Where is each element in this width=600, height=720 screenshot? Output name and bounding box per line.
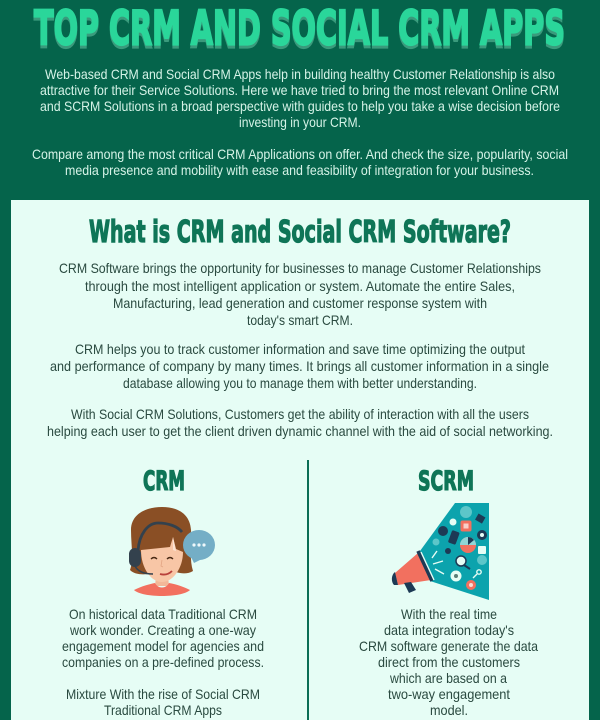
CRM column text: Traditional CRM Apps (104, 702, 222, 718)
SCRM column text: model. (430, 702, 468, 718)
SCRM column text: two-way engagement (388, 686, 510, 702)
icon: megaphone with social icons (392, 503, 489, 600)
SCRM heading: SCRM (418, 466, 474, 497)
CRM column text: companies on a pre-defined process. (62, 654, 264, 670)
intro text: investing in your CRM. (239, 114, 361, 130)
main panel (11, 200, 589, 720)
header background (0, 0, 600, 200)
SCRM column text: CRM software generate the data (359, 638, 538, 654)
panel description text: CRM Software brings the opportunity for businesses to manage Customer Relationships (59, 260, 541, 276)
panel description text: through the most intelligent application or system. Automate the entire Sales, (85, 278, 515, 294)
panel description text: helping each user to get the client driven dynamic channel with the aid of social networking. (47, 423, 553, 439)
CRM column text: Mixture With the rise of Social CRM (66, 686, 260, 702)
column divider (307, 460, 309, 720)
panel description text: and performance of company by many times. It brings all customer information in a single (50, 358, 549, 374)
panel description text: today's smart CRM. (247, 312, 353, 328)
CRM heading: CRM (143, 466, 185, 497)
intro text (32, 66, 568, 178)
CRM column text (62, 606, 264, 718)
panel description text: With Social CRM Solutions, Customers get the ability of interaction with all the users (71, 406, 529, 422)
intro text: media presence and mobility with ease and feasibility of integration for your business. (65, 162, 534, 178)
panel description text (47, 260, 553, 439)
SCRM column text: data integration today's (384, 622, 514, 638)
SCRM column text: which are based on a (389, 670, 507, 686)
icon: support agent (129, 507, 215, 596)
panel description text: CRM helps you to track customer information and save time optimizing the output (75, 341, 525, 357)
panel description text: Manufacturing, lead generation and customer response system with (113, 295, 487, 311)
SCRM column text: With the real time (401, 606, 497, 622)
CRM column text: work wonder. Creating a one-way (69, 622, 256, 638)
SCRM column text: direct from the customers (378, 654, 520, 670)
CRM column text: On historical data Traditional CRM (69, 606, 257, 622)
SCRM column text (359, 606, 538, 718)
panel description text: database allowing you to manage them with better understanding. (123, 375, 477, 391)
CRM column text: engagement model for agencies and (62, 638, 264, 654)
